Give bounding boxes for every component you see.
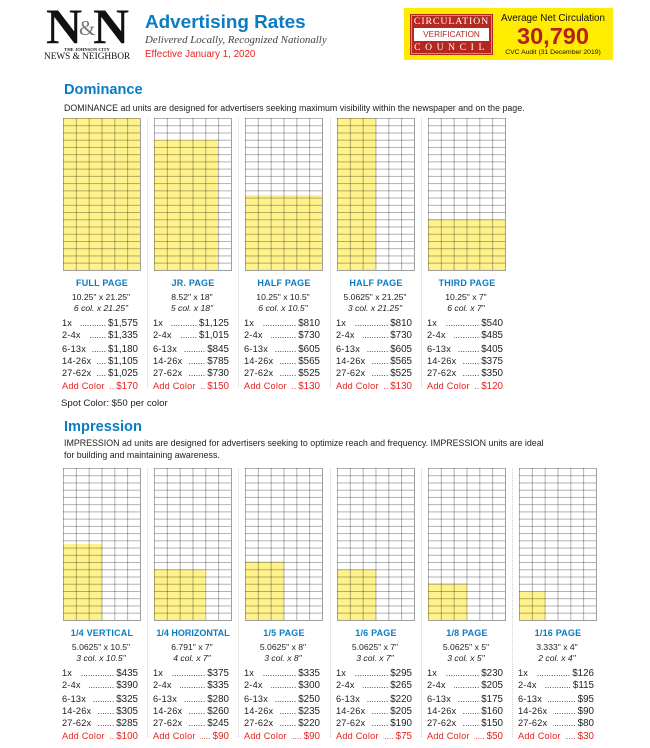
panel: 1/16 page: $90: [578, 706, 594, 717]
panel: half page vertical: $605: [390, 344, 412, 355]
panel: 1/8 page: 2-4x: [427, 680, 446, 690]
panel: 1/4 vertical: Add Color: [62, 731, 105, 741]
panel: full page: $1,180: [108, 344, 138, 355]
panel: 1/5 page: $235: [298, 706, 320, 717]
panel: 1/6 page: 6-13x: [336, 694, 360, 704]
panel: 1/16 page: [518, 468, 597, 742]
panel: 1/16 page: 2-4x: [518, 680, 537, 690]
panel: 1/4 horizontal: 14-26x: [153, 706, 182, 716]
panel: full page: 1x: [62, 318, 72, 328]
grid: [337, 118, 415, 271]
panel: half page vertical: 27-62x: [336, 368, 365, 378]
panel: 1/8 page: $150: [481, 718, 503, 729]
panel: half page vertical: $730: [390, 330, 412, 341]
panel: half page vertical: $525: [390, 368, 412, 379]
panel: 1/6 page: 14-26x: [336, 706, 365, 716]
panel: 1/8 page: $205: [481, 680, 503, 691]
panel: third page: 2-4x: [427, 330, 446, 340]
panel: 1/4 horizontal: 1/4 HORIZONTAL: [156, 628, 230, 638]
panel: jr. page: JR. PAGE: [172, 278, 214, 288]
grid: [63, 118, 141, 271]
panel: 1/4 vertical: $325: [116, 694, 138, 705]
panel: 1/4 vertical: $390: [116, 680, 138, 691]
panel: 1/6 page: Add Color: [336, 731, 379, 741]
panel: 1/4 vertical: [62, 468, 141, 742]
grid: [154, 468, 232, 621]
panel: third page: 10.25" x 7": [445, 292, 487, 302]
panel: 1/16 page: $115: [573, 680, 594, 691]
panel: 1/8 page: 27-62x: [427, 718, 456, 728]
panel: half page horizontal: 6-13x: [244, 344, 268, 354]
panel: half page horizontal: 2-4x: [244, 330, 263, 340]
panel: 1/4 vertical: 27-62x: [62, 718, 91, 728]
panel: full page: Add Color: [62, 381, 105, 391]
panel: third page: Add Color: [427, 381, 470, 391]
panel: jr. page: $150: [207, 381, 229, 392]
panel: 1/4 vertical: 5.0625" x 10.5": [72, 642, 130, 652]
panel: 1/5 page: $90: [304, 731, 320, 742]
panel: 1/4 horizontal: $335: [207, 680, 229, 691]
panel: 1/5 page: 14-26x: [244, 706, 273, 716]
circulation verification council logo: [410, 14, 493, 55]
circulation number: 30,790: [517, 23, 589, 49]
heading: Impression: Impression: [64, 419, 142, 435]
panel: 1/16 page: 1/16 PAGE: [535, 628, 581, 638]
panel: full page: $1,575: [108, 318, 138, 329]
panel: half page vertical: 2-4x: [336, 330, 355, 340]
panel: 1/4 horizontal: $280: [207, 694, 229, 705]
logo: N&N News & Neighbor: [44, 0, 130, 62]
panel: third page: $350: [481, 368, 503, 379]
panel: 1/4 horizontal: 1x: [153, 668, 163, 678]
panel: third page: 6-13x: [427, 344, 451, 354]
panel: 1/4 horizontal: 6.791" x 7": [171, 642, 213, 652]
panel: 1/5 page: $250: [298, 694, 320, 705]
panel: third page: THIRD PAGE: [439, 278, 495, 288]
panel: 1/8 page: $230: [481, 668, 503, 679]
panel: full page: 6-13x: [62, 344, 86, 354]
panel: 1/4 vertical: $285: [116, 718, 138, 729]
panel: 1/8 page: 6-13x: [427, 694, 451, 704]
panel: third page: 6 col. x 7": [447, 303, 485, 313]
grid: [245, 468, 323, 621]
grid: [428, 118, 506, 271]
panel: jr. page: 2-4x: [153, 330, 172, 340]
panel: 1/4 vertical: 14-26x: [62, 706, 91, 716]
spot color note: Spot Color: $50 per color: [61, 398, 168, 409]
circulation badge: [404, 8, 613, 60]
panel: half page horizontal: $565: [298, 356, 320, 367]
panel: 1/5 page: 2-4x: [244, 680, 263, 690]
panel: 1/16 page: 27-62x: [518, 718, 547, 728]
panel: 1/16 page: 14-26x: [518, 706, 547, 716]
panel: jr. page: 8.52" x 18": [171, 292, 213, 302]
panel: 1/4 horizontal: $245: [207, 718, 229, 729]
panel: full page: 2-4x: [62, 330, 81, 340]
panel: jr. page: 6-13x: [153, 344, 177, 354]
panel: half page vertical: 14-26x: [336, 356, 365, 366]
circulation verification council logo: COUNCIL: [414, 42, 489, 53]
impression description: [64, 438, 544, 460]
panel: 1/16 page: $80: [578, 718, 594, 729]
panel: 1/5 page: [244, 468, 323, 742]
panel: 1/4 horizontal: 2-4x: [153, 680, 172, 690]
circulation verification council logo: CIRCULATION: [414, 16, 489, 27]
grid: [428, 468, 506, 621]
panel: 1/16 page: $126: [572, 668, 594, 679]
panel: 1/5 page: 3 col. x 8": [264, 653, 302, 663]
panel: 1/6 page: $265: [390, 680, 412, 691]
panel: third page: 27-62x: [427, 368, 456, 378]
panel: 1/16 page: $30: [578, 731, 594, 742]
panel: 1/4 vertical: 3 col. x 10.5": [76, 653, 126, 663]
panel: third page: $375: [481, 356, 503, 367]
panel: 1/4 horizontal: Add Color: [153, 731, 196, 741]
panel: jr. page: $1,125: [199, 318, 229, 329]
panel: 1/8 page: Add Color: [427, 731, 470, 741]
panel: third page: $540: [481, 318, 503, 329]
panel: half page horizontal: $605: [298, 344, 320, 355]
panel: half page horizontal: Add Color: [244, 381, 287, 391]
panel: 1/6 page: 1/6 PAGE: [355, 628, 397, 638]
average net circulation label: Average Net Circulation: [501, 13, 605, 24]
panel: 1/5 page: 1/5 PAGE: [263, 628, 305, 638]
panel: full page: FULL PAGE: [76, 278, 128, 288]
panel: 1/6 page: $295: [390, 668, 412, 679]
panel: 1/4 horizontal: 4 col. x 7": [173, 653, 211, 663]
panel: 1/4 vertical: 1x: [62, 668, 72, 678]
impression description: IMPRESSION ad units are designed for advertisers seeking to optimize reach and frequency. IMPRESSION units are ideal: [64, 438, 544, 448]
panel: half page horizontal: $730: [298, 330, 320, 341]
panel: third page: [427, 118, 506, 392]
panel: 1/4 vertical: 6-13x: [62, 694, 86, 704]
panel: 1/6 page: $220: [390, 694, 412, 705]
panel: jr. page: $1,015: [199, 330, 229, 341]
audit note: CVC Audit (31 December 2019): [505, 49, 601, 56]
panel: 1/4 horizontal: 27-62x: [153, 718, 182, 728]
panel: 1/8 page: 14-26x: [427, 706, 456, 716]
panel: 1/16 page: $95: [578, 694, 594, 705]
panel: 1/8 page: $160: [481, 706, 503, 717]
panel: half page horizontal: 6 col. x 10.5": [258, 303, 308, 313]
panel: 1/16 page: Add Color: [518, 731, 561, 741]
panel: 1/5 page: 27-62x: [244, 718, 273, 728]
panel: half page vertical: 6-13x: [336, 344, 360, 354]
panel: half page vertical: [336, 118, 415, 392]
panel: 1/4 horizontal: [153, 468, 232, 742]
panel: half page horizontal: $525: [298, 368, 320, 379]
panel: full page: 10.25" x 21.25": [72, 292, 130, 302]
panel: 1/6 page: 1x: [336, 668, 346, 678]
panel: full page: $1,335: [108, 330, 138, 341]
panel: 1/4 vertical: $305: [116, 706, 138, 717]
title: Advertising Rates: [145, 12, 306, 33]
panel: half page horizontal: 14-26x: [244, 356, 273, 366]
panel: jr. page: $845: [207, 344, 229, 355]
panel: third page: 14-26x: [427, 356, 456, 366]
panel: half page vertical: 3 col. x 21.25": [348, 303, 402, 313]
impression description: for building and maintaining awareness.: [64, 450, 220, 460]
panel: jr. page: Add Color: [153, 381, 196, 391]
panel: jr. page: $785: [207, 356, 229, 367]
grid: [63, 468, 141, 621]
panel: 1/8 page: 1/8 PAGE: [446, 628, 488, 638]
panel: 1/8 page: $175: [481, 694, 503, 705]
panel: half page vertical: $130: [390, 381, 412, 392]
panel: 1/16 page: 2 col. x 4": [538, 653, 576, 663]
panel: 1/4 vertical: $100: [116, 731, 138, 742]
panel: jr. page: [153, 118, 232, 392]
panel: 1/5 page: $335: [298, 668, 320, 679]
panel: half page vertical: $810: [390, 318, 412, 329]
panel: third page: 1x: [427, 318, 437, 328]
panel: half page horizontal: [244, 118, 323, 392]
circulation verification council logo: VERIFICATION: [423, 30, 480, 39]
panel: 1/6 page: 27-62x: [336, 718, 365, 728]
panel: 1/4 horizontal: 6-13x: [153, 694, 177, 704]
panel: 1/6 page: [336, 468, 415, 742]
panel: 1/4 horizontal: $375: [207, 668, 229, 679]
panel: half page vertical: Add Color: [336, 381, 379, 391]
panel: jr. page: $730: [207, 368, 229, 379]
grid: [245, 118, 323, 271]
dominance description: DOMINANCE ad units are designed for advertisers seeking maximum visibility within the newspaper and on the page.: [64, 103, 525, 113]
panel: full page: 27-62x: [62, 368, 91, 378]
panel: full page: 14-26x: [62, 356, 91, 366]
panel: third page: $485: [481, 330, 503, 341]
panel: 1/16 page: 1x: [518, 668, 528, 678]
panel: half page horizontal: HALF PAGE: [257, 278, 311, 288]
panel: half page vertical: HALF PAGE: [349, 278, 403, 288]
panel: half page vertical: 1x: [336, 318, 346, 328]
panel: 1/6 page: 5.0625" x 7": [352, 642, 398, 652]
panel: 1/6 page: $205: [390, 706, 412, 717]
panel: 1/4 vertical: $435: [116, 668, 138, 679]
grid: [154, 118, 232, 271]
panel: jr. page: 27-62x: [153, 368, 182, 378]
panel: half page horizontal: 10.25" x 10.5": [256, 292, 310, 302]
panel: 1/8 page: [427, 468, 506, 742]
panel: half page vertical: $565: [390, 356, 412, 367]
panel: half page horizontal: 27-62x: [244, 368, 273, 378]
panel: 1/5 page: Add Color: [244, 731, 287, 741]
panel: 1/5 page: $300: [298, 680, 320, 691]
grid: [519, 468, 597, 621]
logo: N&N News & Neighbor: NEWS & NEIGHBOR: [44, 52, 130, 62]
panel: half page vertical: 5.0625" x 21.25": [344, 292, 406, 302]
panel: 1/8 page: $50: [487, 731, 503, 742]
panel: 1/8 page: 1x: [427, 668, 437, 678]
tagline: Delivered Locally, Recognized Nationally: [145, 34, 327, 46]
panel: 1/5 page: 5.0625" x 8": [260, 642, 306, 652]
panel: 1/6 page: $75: [396, 731, 412, 742]
panel: full page: $170: [116, 381, 138, 392]
panel: full page: 6 col. x 21.25": [74, 303, 128, 313]
panel: 1/4 vertical: 2-4x: [62, 680, 81, 690]
panel: jr. page: 14-26x: [153, 356, 182, 366]
heading: Dominance: Dominance: [64, 82, 143, 98]
panel: third page: $120: [481, 381, 503, 392]
panel: third page: $405: [481, 344, 503, 355]
panel: 1/8 page: 3 col. x 5": [447, 653, 485, 663]
logo: N&N News & Neighbor: THE JOHNSON CITY: [64, 47, 110, 52]
panel: half page horizontal: $130: [298, 381, 320, 392]
panel: 1/6 page: 3 col. x 7": [356, 653, 394, 663]
panel: 1/4 vertical: 1/4 VERTICAL: [71, 628, 133, 638]
panel: 1/6 page: $190: [390, 718, 412, 729]
panel: 1/5 page: 1x: [244, 668, 254, 678]
grid: [337, 468, 415, 621]
panel: 1/16 page: 3.333" x 4": [536, 642, 578, 652]
panel: full page: [62, 118, 141, 392]
panel: 1/4 horizontal: $260: [207, 706, 229, 717]
panel: full page: $1,105: [108, 356, 138, 367]
panel: jr. page: 5 col. x 18": [171, 303, 213, 313]
panel: half page horizontal: 1x: [244, 318, 254, 328]
panel: 1/6 page: 2-4x: [336, 680, 355, 690]
panel: full page: $1,025: [108, 368, 138, 379]
logo: N&N News & Neighbor: &: [79, 16, 95, 40]
panel: jr. page: 1x: [153, 318, 163, 328]
panel: 1/8 page: 5.0625" x 5": [443, 642, 489, 652]
effective date: Effective January 1, 2020: [145, 49, 255, 60]
panel: 1/4 horizontal: $90: [213, 731, 229, 742]
panel: 1/5 page: 6-13x: [244, 694, 268, 704]
panel: half page horizontal: $810: [298, 318, 320, 329]
panel: 1/5 page: $220: [298, 718, 320, 729]
panel: 1/16 page: 6-13x: [518, 694, 542, 704]
